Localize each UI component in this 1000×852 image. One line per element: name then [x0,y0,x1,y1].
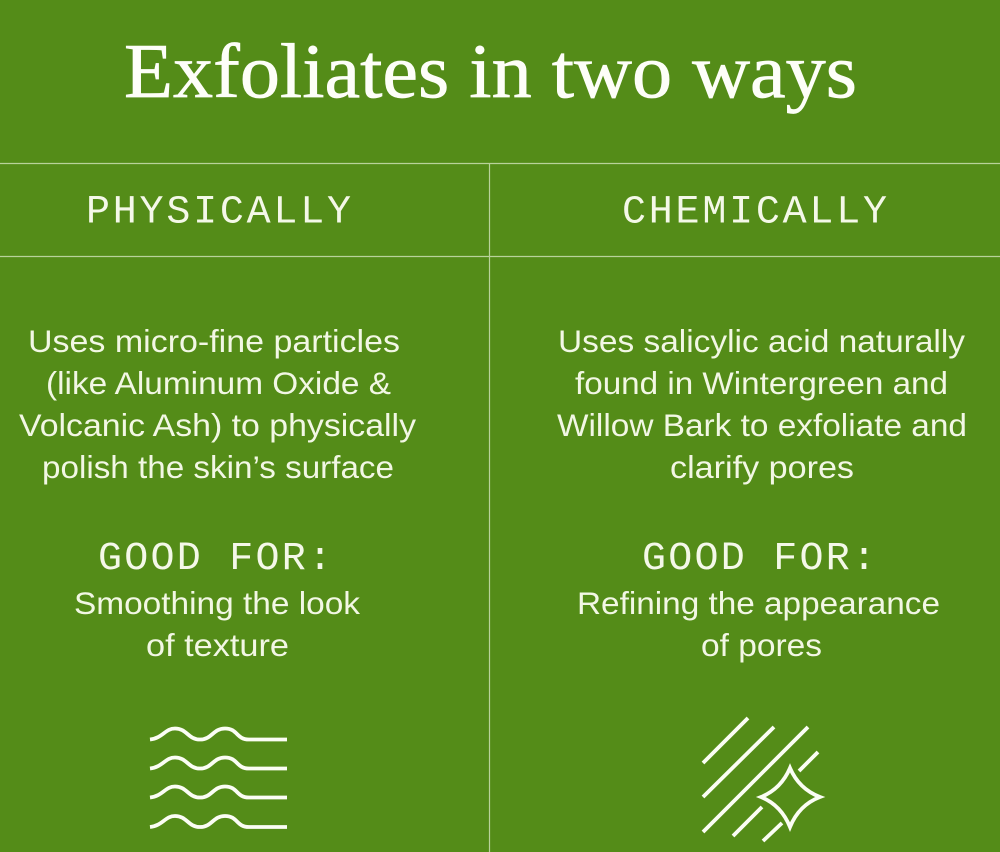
text block: chemical description: found in Wintergreen and [575,365,948,401]
text block: chemical benefit: Refining the appearance [577,585,940,621]
text block: chemical description: Uses salicylic acid naturally [558,323,965,359]
panel: chemically [557,190,967,841]
text block: physical description: Uses micro-fine particles [28,323,400,359]
title: Exfoliates in two ways [124,28,857,114]
text block: physical benefit [74,585,360,663]
panel: physically [19,190,416,827]
text block: physical description: (like Aluminum Oxide & [46,365,391,401]
heading: physically: PHYSICALLY [86,190,351,236]
heading: chemically: CHEMICALLY [622,190,887,236]
text block: physical description: Volcanic Ash) to physically [19,407,416,443]
icon: wavy texture lines [150,728,287,827]
text block: physical benefit: Smoothing the look [74,585,360,621]
subheading: good for physical: GOOD FOR: [98,537,332,582]
text block: chemical description [557,323,967,485]
text block: chemical description: clarify pores [670,449,854,485]
text block: chemical description: Willow Bark to exfoliate and [557,407,967,443]
icon: diagonal lines with sparkle [703,718,820,841]
text block: chemical benefit [577,585,940,663]
text block: chemical benefit: of pores [701,627,822,663]
subheading: good for chemical: GOOD FOR: [642,537,876,582]
text block: physical description: polish the skin’s surface [42,449,394,485]
text block: physical description [19,323,416,485]
text block: physical benefit: of texture [146,627,289,663]
